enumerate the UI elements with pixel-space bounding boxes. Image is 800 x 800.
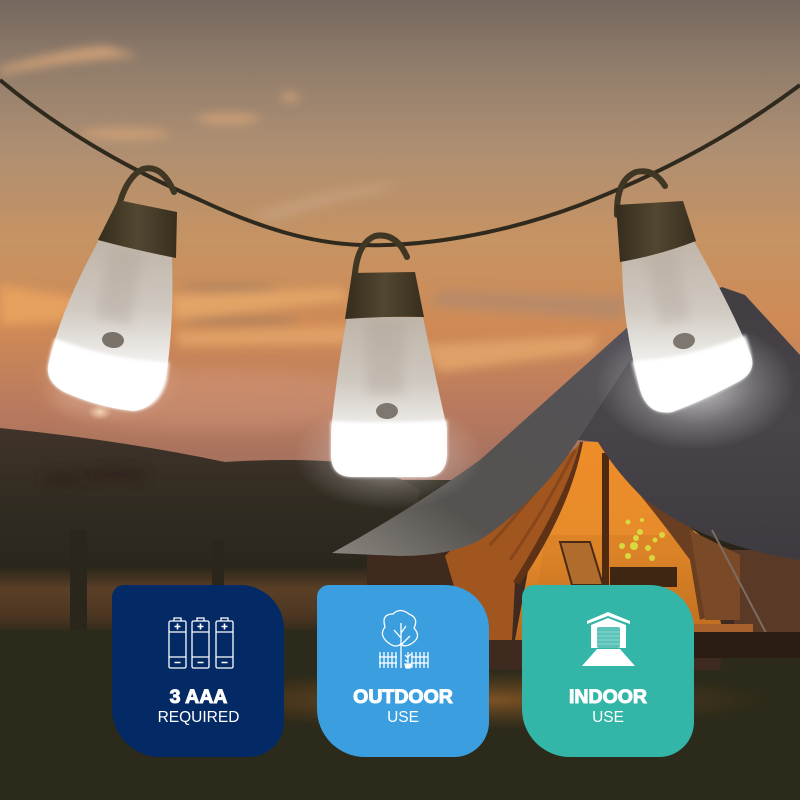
cap (98, 200, 177, 258)
right curtain (612, 462, 730, 620)
hook (355, 235, 407, 273)
card: indoor use (522, 585, 694, 757)
lantern glows (33, 320, 795, 510)
cap (345, 272, 424, 319)
background: sunset sky (0, 0, 800, 480)
tent (332, 287, 800, 670)
lit band (331, 420, 447, 477)
left curtain (445, 442, 582, 640)
cap (616, 201, 696, 262)
lantern left (48, 168, 177, 411)
tent wall (367, 550, 800, 670)
lit band (48, 338, 169, 411)
lantern body (48, 238, 172, 411)
plant lights (619, 518, 665, 561)
icon: three AAA batteries (169, 618, 233, 668)
label: 3 AAA: 3 AAA (170, 686, 227, 708)
rope (0, 80, 800, 245)
lantern body (622, 238, 752, 413)
lit band (632, 335, 752, 413)
label: use: USE (387, 709, 419, 726)
label: indoor: INDOOR (569, 686, 647, 708)
icon: tree and fence (379, 610, 428, 668)
button (376, 403, 398, 419)
chair (560, 542, 603, 585)
hook (120, 168, 174, 202)
background: hills and grass (0, 428, 800, 800)
lantern right (616, 171, 752, 413)
card: 3 AAA required (112, 585, 284, 757)
lantern center (331, 235, 447, 477)
tent roof left flap (332, 325, 640, 556)
tent interior (515, 442, 725, 640)
icon: garage (582, 612, 635, 666)
card: outdoor use (317, 585, 489, 757)
label: use: USE (592, 709, 624, 726)
button (101, 331, 125, 349)
tent roof right (578, 287, 800, 560)
button (672, 332, 696, 350)
hook (617, 171, 665, 215)
label: required: REQUIRED (158, 709, 239, 726)
label: outdoor: OUTDOOR (353, 686, 453, 708)
lantern body (331, 317, 447, 477)
